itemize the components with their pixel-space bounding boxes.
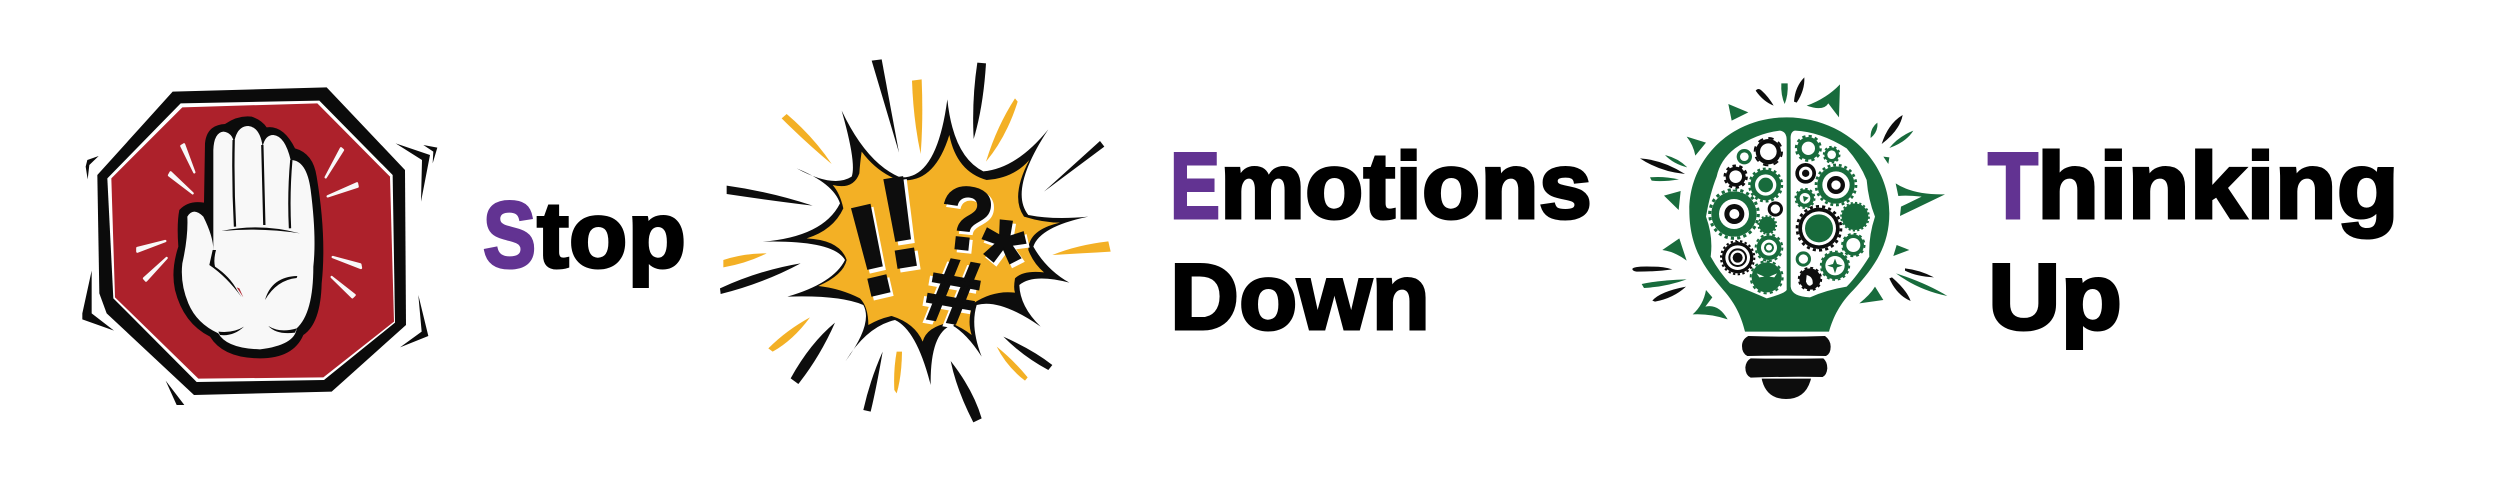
symbols: exclamation marks, question mark, hash, asterisk: ! (868, 147, 933, 298)
black rays (720, 59, 1104, 422)
icon: stop sign with hand (82, 87, 437, 405)
label: Stop: S (483, 182, 536, 287)
bulb glass (1689, 117, 1889, 332)
symbols: exclamation marks, question mark, hash, asterisk: # (917, 242, 983, 349)
bulb screw base (1742, 336, 1831, 399)
icon: light bulb with gear brain (1632, 77, 1947, 399)
symbols: exclamation marks, question mark, hash, asterisk: ? (937, 170, 1002, 275)
hand (173, 116, 323, 358)
symbols: exclamation marks, question mark, hash, asterisk: * (976, 198, 1033, 329)
symbols: exclamation marks, question mark, hash, asterisk: ! (871, 150, 936, 301)
symbols: exclamation marks, question mark, hash, asterisk (833, 147, 1033, 349)
label: Emotions Down (1170, 133, 1592, 349)
label: Emotions Down: E (1170, 133, 1220, 238)
burst black outline (763, 99, 1088, 385)
label: Thinking Up (1988, 133, 2399, 349)
symbols: exclamation marks, question mark, hash, asterisk: ! (833, 174, 908, 326)
symbols: exclamation marks, question mark, hash, asterisk: ! (836, 177, 911, 329)
label: Thinking Up: T (1988, 133, 2038, 238)
green sparks (1642, 83, 1947, 319)
label: Thinking Up: hinking (2037, 133, 2399, 238)
stop sign octagon (97, 87, 406, 395)
symbols: exclamation marks, question mark, hash, asterisk: ? (934, 167, 999, 272)
label: Thinking Up: Up (1988, 244, 2122, 349)
black sparks (1632, 77, 1934, 302)
label: Emotions Down: motions (1220, 133, 1592, 238)
white motion dashes around hand (137, 144, 361, 297)
icon: explosion burst with symbols (720, 59, 1111, 422)
burst yellow fill (807, 135, 1060, 342)
label: Stop: top (537, 182, 686, 287)
label: Emotions Down: Down (1170, 244, 1430, 349)
yellow rays (723, 79, 1111, 393)
brain hemispheres (1706, 131, 1875, 298)
symbols: exclamation marks, question mark, hash, asterisk: # (920, 239, 987, 346)
black shake marks around sign (82, 143, 437, 405)
gears right hemisphere (1795, 136, 1869, 290)
symbols: exclamation marks, question mark, hash, asterisk: * (973, 195, 1031, 325)
gears left hemisphere (1710, 138, 1783, 293)
